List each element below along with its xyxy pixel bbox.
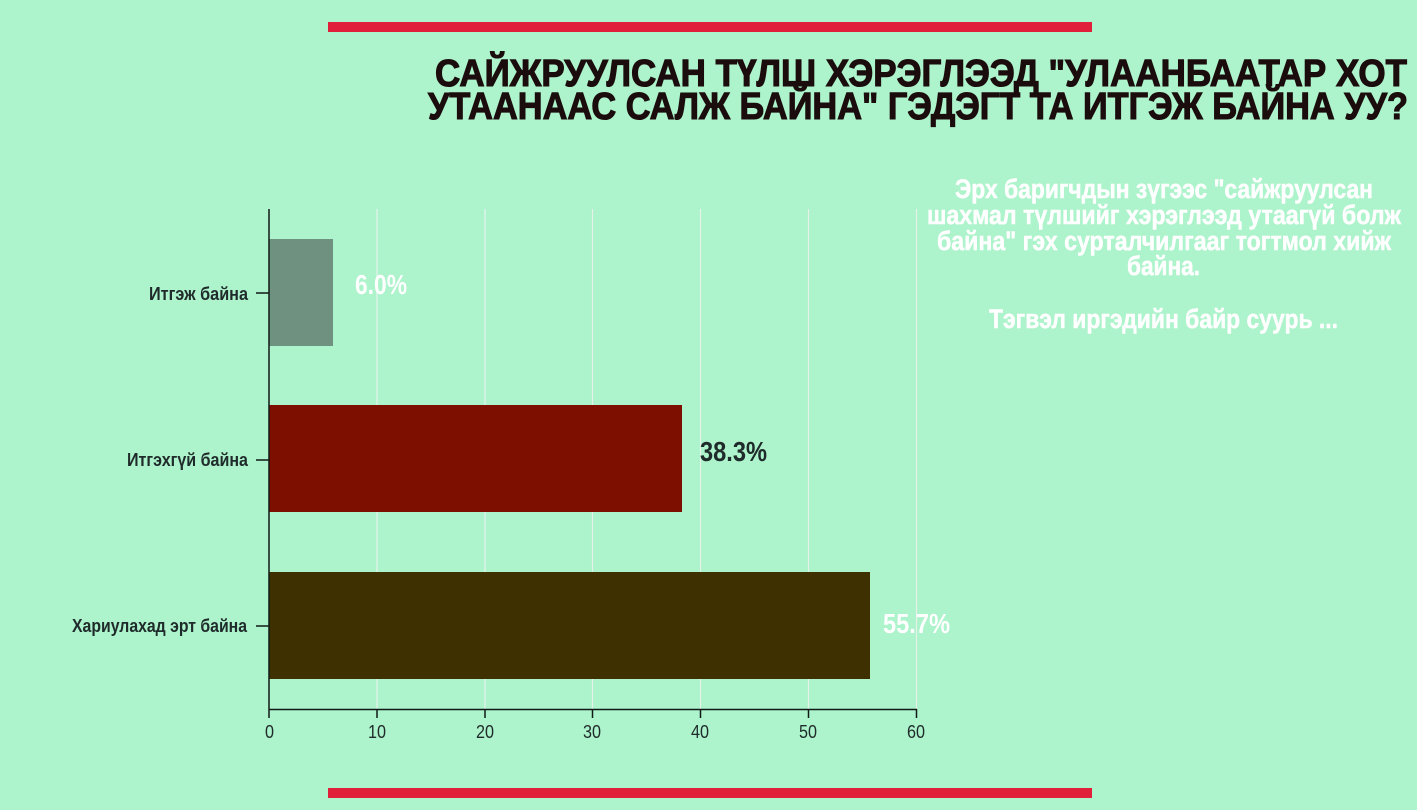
x axis labels: 0 (265, 722, 274, 742)
x axis labels: 60 (907, 722, 925, 742)
bar: Итгэхгүй байна 38.3% (269, 405, 682, 512)
bottom red rule (328, 788, 1092, 798)
category labels: Итгэж байна (149, 284, 249, 304)
gridlines (377, 209, 916, 709)
bar: Итгэж байна 6.0% (269, 239, 333, 346)
description text block: байна. (1127, 251, 1200, 281)
description text block: Тэгвэл иргэдийн байр суурь ... (989, 304, 1338, 334)
x axis labels: 20 (476, 722, 494, 742)
category labels: Итгэхгүй байна (127, 450, 249, 470)
bar chart (72, 209, 950, 742)
value labels (355, 269, 950, 639)
bar: Хариулахад эрт байна 55.7% (269, 572, 870, 679)
top red rule (328, 22, 1092, 32)
x axis labels: 10 (368, 722, 386, 742)
x axis labels (265, 722, 925, 742)
value labels: 6.0% (355, 269, 407, 300)
value labels: 38.3% (700, 436, 767, 467)
x axis labels: 30 (583, 722, 601, 742)
axes and ticks (256, 209, 917, 718)
x axis labels: 40 (691, 722, 709, 742)
description text block (927, 174, 1402, 334)
x axis labels: 50 (799, 722, 817, 742)
title (428, 50, 1408, 128)
category labels: Хариулахад эрт байна (72, 616, 248, 636)
value labels: 55.7% (883, 608, 950, 639)
category labels (72, 284, 249, 636)
